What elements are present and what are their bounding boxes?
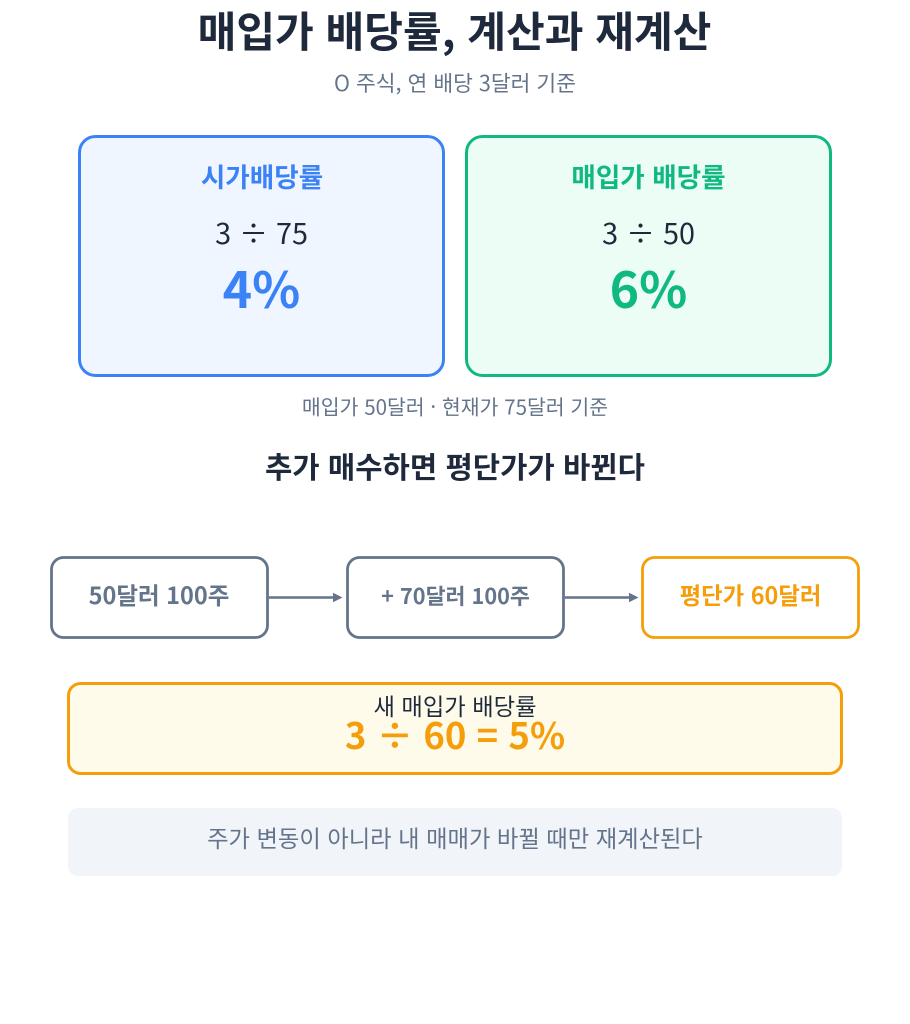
flow box: average price: 평단가 60달러 (680, 577, 821, 611)
section heading: 추가 매수하면 평단가가 바뀐다 (265, 444, 645, 487)
panel: purchase price dividend yield: 6% (610, 251, 687, 323)
footer note: 주가 변동이 아니라 내 매매가 바뀔 때만 재계산된다 (207, 820, 703, 854)
panel: market dividend yield: 4% (223, 251, 300, 323)
panel: purchase price dividend yield (466, 136, 830, 376)
panel: purchase price dividend yield: 3 ÷ 50 (602, 212, 695, 253)
callout: new purchase price yield: 새 매입가 배당률 (373, 688, 537, 722)
title: 매입가 배당률, 계산과 재계산 (198, 0, 711, 60)
callout: new purchase price yield (68, 684, 842, 774)
panel: market dividend yield: 시가배당률 (201, 156, 323, 195)
flow box: additional purchase (348, 558, 564, 638)
price basis note: 매입가 50달러 · 현재가 75달러 기준 (302, 390, 608, 420)
callout: new purchase price yield: 3 ÷ 60 = 5% (345, 707, 565, 760)
flow box: average price (642, 558, 858, 638)
arrow: second purchase to average price (565, 593, 638, 602)
panel: purchase price dividend yield: 매입가 배당률 (571, 156, 726, 195)
panel: market dividend yield (80, 136, 444, 376)
flow box: first purchase: 50달러 100주 (89, 577, 229, 611)
arrow: first to second purchase (269, 593, 342, 602)
subtitle: O 주식, 연 배당 3달러 기준 (334, 67, 576, 98)
panel: market dividend yield: 3 ÷ 75 (215, 212, 308, 253)
flow box: first purchase (52, 558, 268, 638)
flow box: additional purchase: + 70달러 100주 (381, 580, 530, 611)
footer note (68, 808, 842, 876)
